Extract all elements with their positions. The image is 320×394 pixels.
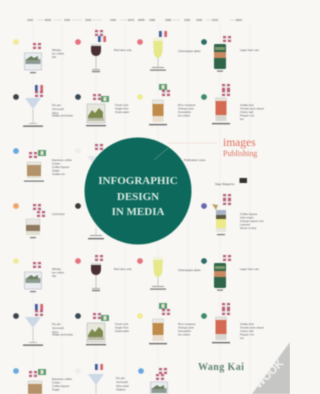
top timeline ruler: 1995: [196, 18, 203, 22]
drink: red tall glass, row 2: Vodka shot: [240, 103, 254, 107]
drink: rocks glass, row 5: Ice cubes: [52, 270, 65, 274]
drink: highball, row 2: Fresh mint: [115, 103, 128, 107]
drink: martini, row 6: Dry gin: [52, 322, 61, 326]
drink: short brown glass, row 4: Cold brew: [52, 212, 66, 216]
drink: red tall glass, row 2: Ice: [240, 117, 244, 121]
drink: red tall glass, row 6: Celery salt: [240, 329, 253, 333]
top timeline ruler: 2010: [236, 18, 243, 22]
drink: red wine, row 1: [91, 30, 132, 72]
drink: martini, row 2: Dry gin: [52, 103, 61, 107]
wook watermark corner: [252, 342, 290, 394]
author name: Wang Kai: [198, 362, 244, 373]
drink: layered glass, right column: Coffee liqueur: [240, 212, 257, 216]
drink: red tall glass, row 6: [212, 303, 264, 343]
drink: orange tall glass, row 6: Orange juice: [178, 326, 194, 330]
drink: red tall glass, row 2: Tomato juice sauce: [240, 106, 264, 110]
drink: short brown glass, row 4: [26, 204, 66, 238]
drink: martini, row 7: Dry gin: [116, 376, 125, 380]
drink: orange tall glass, row 2: Ice cubes: [178, 114, 191, 118]
drink: layered glass, right column: Orange liqueur mix: [240, 219, 264, 223]
drink: brown glass, row 3: Sugar: [52, 168, 60, 172]
sage magazine label: [215, 178, 247, 186]
top timeline ruler: 1920: [27, 18, 34, 22]
drink: brown glass, row 7: Sugar: [52, 388, 60, 392]
pointer line: [154, 148, 168, 160]
drink: champagne, row 1: Champagne glass: [178, 49, 201, 53]
drink: orange tall glass, row 2: Grenadine: [178, 110, 192, 114]
drink: martini, row 2: Olive: [52, 111, 59, 115]
drink: martini, row 7: Vermouth: [116, 380, 128, 384]
colour dots: [13, 39, 207, 374]
drink: red tall glass, row 2: Pepper mix: [240, 114, 255, 118]
drink: red wine, row 5: [91, 255, 132, 291]
sage magazine label: Sage Magazine: [215, 182, 235, 186]
drink: beer can, row 5: Lager beer can: [240, 267, 259, 271]
top timeline ruler: 1960: [110, 18, 117, 22]
top timeline ruler: 1940: [64, 18, 71, 22]
drink: martini, row 7: [86, 364, 129, 394]
drink: red tall glass, row 6: Tomato juice sauce: [240, 326, 264, 330]
top timeline ruler: 1985: [165, 18, 172, 22]
drink: rocks glass, row 1: Whisky: [52, 48, 62, 52]
small note by circle: Publication notes: [184, 158, 206, 162]
drink: highball, row 6: Fresh mint: [115, 322, 128, 326]
drink: red tall glass, row 6: Vodka shot: [240, 322, 254, 326]
faint vertical grid lines: [33, 22, 250, 394]
drink: brown glass, row 3: Cream: [52, 162, 61, 166]
drink: martini, row 7: Shaken: [116, 388, 126, 392]
top timeline ruler: [27, 18, 243, 22]
drink: martini, row 2: [23, 85, 73, 127]
wook watermark corner: WOOK: [253, 358, 286, 391]
drink: martini, row 6: Shake and strain: [52, 332, 73, 336]
drink: orange tall glass, row 2: [149, 84, 196, 125]
drink: highball, row 2: Sugar lime: [115, 106, 129, 110]
top timeline ruler: 1970: [128, 18, 135, 22]
drink: beer can, row 1: Lager beer can: [240, 48, 259, 52]
drink: orange tall glass, row 6: [149, 303, 196, 344]
publisher logo: images: [223, 137, 256, 149]
drink: beer can, row 5: [214, 255, 259, 291]
drink: layered glass, right column: Layered: [240, 222, 251, 226]
drink: champagne, row 1: [150, 31, 201, 71]
pointer to publisher: [168, 142, 217, 144]
drink: highball, row 6: [86, 313, 129, 345]
drink: martini, row 6: [23, 304, 73, 346]
drink: red tall glass, row 6: Pepper mix: [240, 332, 255, 336]
drink: rocks glass, row 5: Whisky: [52, 267, 62, 271]
drink: martini behind circle, row 3: [87, 144, 109, 169]
title: INFOGRAPHIC: [98, 175, 178, 187]
top timeline ruler: 1980: [149, 18, 156, 22]
drink: brown glass, row 7: Espresso coffee: [52, 377, 72, 381]
drink: red wine, row 5: Red wine only: [114, 267, 132, 271]
drink: red tall glass, row 6: Ice: [240, 336, 244, 340]
main green circle: [84, 138, 192, 244]
drink: brown glass, row 3: Vodka mix: [52, 172, 66, 176]
drink: rocks glass, row 7: [150, 368, 168, 394]
drink: highball, row 6: Sugar lime: [115, 326, 129, 330]
drink: layered glass, right column: [212, 194, 264, 235]
top timeline ruler: 1975: [138, 18, 145, 22]
drink: beer can, row 1: [214, 36, 259, 72]
drink: martini, row 6: Olive: [52, 330, 59, 334]
drink: rocks glass, row 5: Stir: [52, 274, 56, 278]
top timeline ruler: 2000: [212, 18, 219, 22]
title: DESIGN: [117, 191, 159, 203]
drink: brown glass, row 3: Coffee liqueur: [52, 165, 69, 169]
drink: highball, row 2: Soda water: [115, 110, 129, 114]
top timeline ruler: 1990: [184, 18, 191, 22]
drink: highball, row 6: Soda water: [115, 329, 129, 333]
title: [98, 175, 178, 218]
drink: champagne, row 5: [150, 257, 201, 290]
top timeline ruler: 1930: [45, 18, 52, 22]
top timeline ruler: 1950: [85, 18, 92, 22]
drink: orange tall glass, row 2: Rum measure: [178, 103, 196, 107]
drink: rocks glass, row 1: [24, 43, 65, 73]
drink: brown glass, row 3: Espresso coffee: [52, 158, 72, 162]
drink: red tall glass, row 2: Celery salt: [240, 110, 253, 114]
drink: rocks glass, row 1: Stir: [52, 55, 56, 59]
publisher logo: [223, 137, 257, 158]
drink: orange tall glass, row 6: Ice cubes: [178, 332, 191, 336]
drink: martini, row 7: Olive twist: [116, 384, 129, 388]
drink: orange tall glass, row 6: Grenadine: [178, 329, 192, 333]
drink: orange tall glass, row 2: Orange juice: [178, 106, 194, 110]
drink: layered glass, right column: Irish cream: [240, 216, 255, 220]
drink: highball, row 2: [86, 94, 129, 126]
publisher logo: Publishing: [223, 149, 257, 158]
drink: champagne, row 5: Champagne glass: [178, 268, 201, 272]
drink: red wine, row 1: Red wine only: [114, 48, 132, 52]
drink: red tall glass, row 2: [212, 84, 264, 124]
drink: brown glass, row 7: Coffee liqueur: [52, 384, 69, 388]
title: IN MEDIA: [112, 206, 164, 218]
drink: martini, row 2: Shake and strain: [52, 114, 73, 118]
drink: rocks glass, row 1: Ice cubes: [52, 52, 65, 56]
drink: stem below circle, row 4: [88, 228, 104, 239]
drink: orange tall glass, row 6: Rum measure: [178, 322, 196, 326]
drink: martini, row 6: Vermouth: [52, 326, 64, 330]
drink: layered glass, right column: Serve in shot: [240, 226, 257, 230]
drink: brown glass, row 7: Cream: [52, 380, 61, 384]
drink: brown glass, row 3: [24, 150, 72, 182]
drink: brown glass, row 7: [25, 369, 72, 394]
drink: rocks glass, row 5: [24, 262, 65, 292]
drink: martini, row 2: Vermouth: [52, 107, 64, 111]
